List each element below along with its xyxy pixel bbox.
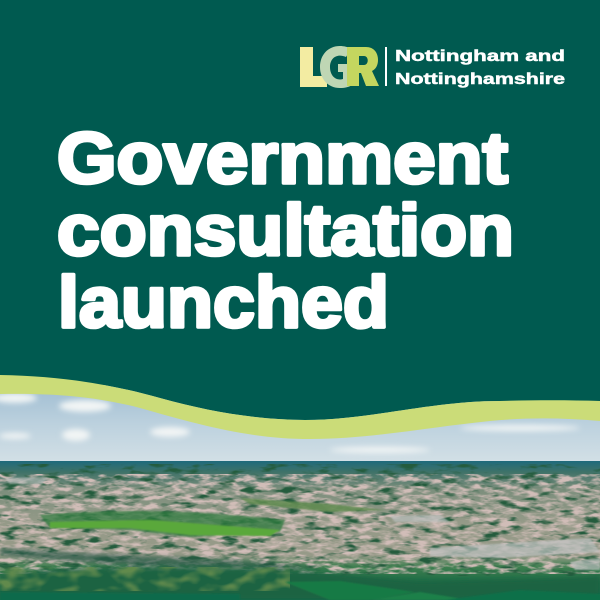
dark tree band xyxy=(0,548,330,569)
logo divider xyxy=(385,47,387,86)
clouds xyxy=(0,393,580,453)
tree texture xyxy=(0,464,600,576)
logo mark: LGR xyxy=(300,46,379,88)
grey rooftops xyxy=(5,477,600,570)
aerial landscape photo xyxy=(0,385,600,600)
title line 3: launched xyxy=(58,263,389,343)
title xyxy=(57,119,514,343)
bright green fields xyxy=(40,498,385,537)
foreground trees xyxy=(0,567,600,600)
dark panel edge above wave xyxy=(0,370,600,420)
title line 2: consultation xyxy=(57,191,514,271)
logo text line 1: Nottingham and xyxy=(395,48,565,65)
letter L xyxy=(300,47,327,87)
lime wave band xyxy=(0,375,600,439)
title line 1: Government xyxy=(57,119,508,199)
housing texture xyxy=(0,474,600,574)
letter R xyxy=(347,47,379,86)
foreground fields xyxy=(0,581,600,600)
sky xyxy=(0,385,600,463)
logo: LGR Nottingham and Nottinghamshire xyxy=(300,46,565,88)
letter G xyxy=(320,46,352,88)
logo text line 2: Nottinghamshire xyxy=(395,71,565,88)
horizon and land xyxy=(0,461,600,600)
